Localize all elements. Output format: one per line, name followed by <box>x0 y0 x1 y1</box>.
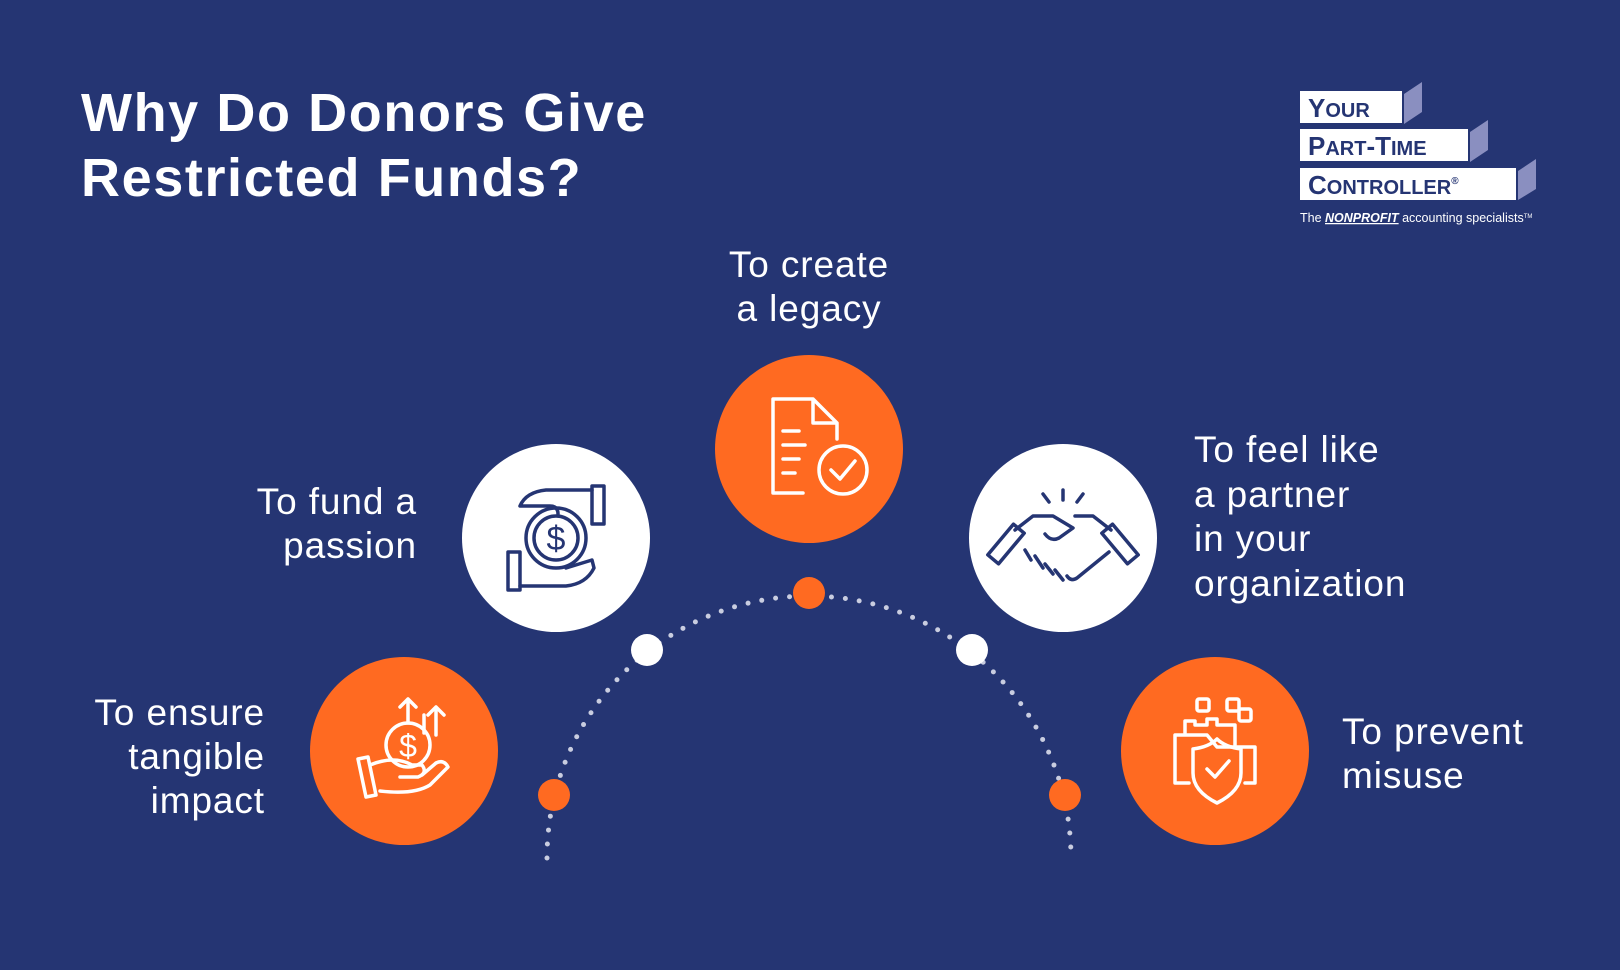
arc markers <box>538 577 1081 811</box>
label: misuse: misuse <box>1342 755 1465 796</box>
label: passion: To fund a <box>257 481 417 522</box>
logo: CONTROLLER <box>1308 170 1451 200</box>
label: legacy: a legacy <box>736 288 882 329</box>
logo <box>1300 82 1536 225</box>
dotted arc <box>547 596 1071 858</box>
label: partner: a partner <box>1194 474 1350 515</box>
circle: partner <box>969 444 1157 632</box>
label: passion: passion <box>283 525 417 566</box>
title <box>81 83 647 208</box>
label: tangible impact <box>94 692 265 821</box>
label: misuse <box>1342 711 1524 796</box>
logo: PART-TIME <box>1308 131 1427 161</box>
circle: misuse <box>1121 657 1309 845</box>
circle: passion: $ <box>547 520 566 558</box>
logo: TM <box>1524 214 1532 220</box>
circle: legacy <box>715 355 903 543</box>
label: tangible impact: impact <box>151 780 265 821</box>
label: partner: in your <box>1194 518 1311 559</box>
label: legacy <box>729 244 889 329</box>
circle: passion <box>462 444 650 632</box>
label: legacy: To create <box>729 244 889 285</box>
logo: The NONPROFIT accounting specialists <box>1300 211 1524 225</box>
logo: YOUR <box>1308 93 1370 123</box>
label: tangible impact: To ensure <box>94 692 265 733</box>
label: partner: To feel like <box>1194 429 1380 470</box>
label: passion <box>257 481 417 566</box>
label: misuse: To prevent <box>1342 711 1524 752</box>
label: partner <box>1194 429 1406 604</box>
circle: tangible impact <box>310 657 498 845</box>
title: Restricted Funds? <box>81 148 582 208</box>
label: partner: organization <box>1194 563 1406 604</box>
circle: tangible impact: $ <box>399 728 417 764</box>
logo: ® <box>1451 176 1459 187</box>
label: tangible impact: tangible <box>128 736 265 777</box>
title: Why Do Donors Give <box>81 83 647 143</box>
